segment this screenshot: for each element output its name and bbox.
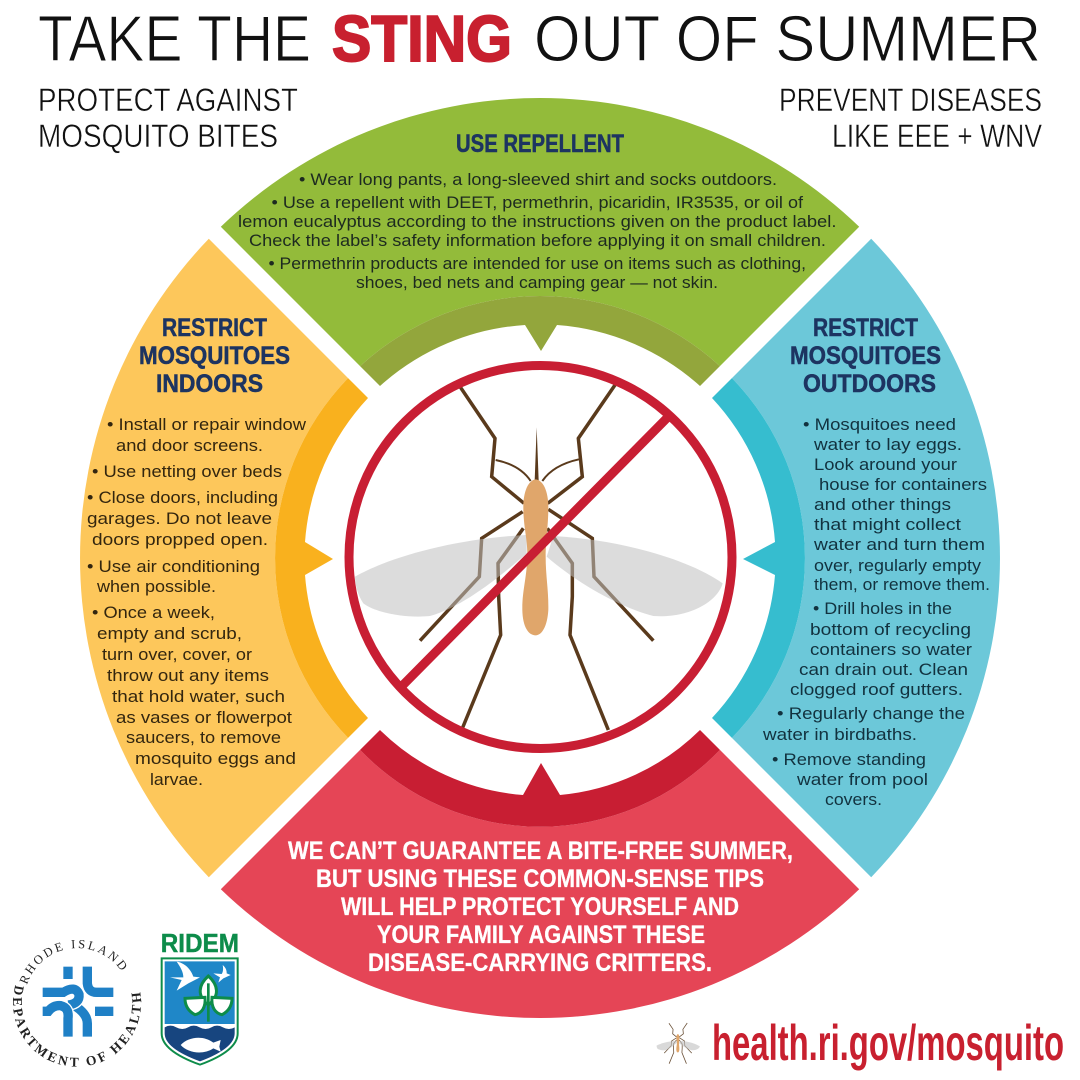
panel: use repellent: Check the label’s safety information before applying it on small children. — [249, 232, 826, 250]
logo: Rhode Island Department of Health: RHODE ISLAND — [19, 940, 126, 984]
icon: small mosquito — [657, 1023, 700, 1064]
icon: crossed-out mosquito — [349, 366, 732, 748]
panel: restrict mosquitoes indoors: doors propped open. — [92, 530, 268, 549]
panel: restrict mosquitoes outdoors: MOSQUITOES — [790, 342, 941, 370]
panel: bite-free summer message: WE CAN’T GUARANTEE A BITE-FREE SUMMER, — [288, 837, 793, 865]
panel: restrict mosquitoes outdoors: bottom of recycling — [810, 620, 971, 639]
panel: use repellent: USE REPELLENT — [456, 130, 624, 158]
panel: restrict mosquitoes indoors: • Close doors, including — [87, 488, 278, 507]
panel: restrict mosquitoes outdoors: Look around your — [814, 455, 957, 474]
panel: restrict mosquitoes outdoors: water and turn them — [813, 535, 985, 554]
panel: restrict mosquitoes outdoors: and other things — [814, 495, 951, 514]
panel: restrict mosquitoes outdoors: can drain out. Clean — [799, 660, 968, 679]
panel: restrict mosquitoes indoors: throw out any items — [107, 666, 269, 685]
subtitle left: MOSQUITO BITES — [38, 118, 278, 154]
panel: use repellent: • Wear long pants, a long-sleeved shirt and socks outdoors. — [299, 171, 777, 189]
panel: restrict mosquitoes indoors: when possible. — [96, 577, 216, 596]
panel: bite-free summer message — [221, 730, 859, 1018]
panel: restrict mosquitoes outdoors: • Regularly change the — [777, 704, 965, 723]
panel: bite-free summer message: YOUR FAMILY AGAINST THESE — [377, 921, 705, 949]
panel: restrict mosquitoes outdoors: water in birdbaths. — [762, 725, 917, 744]
panel: bite-free summer message: WILL HELP PROTECT YOURSELF AND — [341, 893, 739, 921]
panel: restrict mosquitoes outdoors: RESTRICT — [813, 314, 918, 342]
panel: restrict mosquitoes outdoors: clogged roof gutters. — [790, 680, 963, 699]
logo: Rhode Island Department of Health: DEPARTMENT OF HEALTH — [13, 985, 142, 1067]
panel: bite-free summer message: DISEASE-CARRYING CRITTERS. — [368, 949, 712, 977]
panel: use repellent: • Use a repellent with DEET, permethrin, picaridin, IR3535, or oil of — [272, 194, 803, 212]
panel: restrict mosquitoes indoors: turn over, cover, or — [102, 645, 252, 664]
panel: restrict mosquitoes indoors: that hold water, such — [112, 687, 285, 706]
panel: restrict mosquitoes outdoors: containers so water — [810, 640, 972, 659]
panel: use repellent: • Permethrin products are intended for use on items such as clothing, — [268, 255, 806, 273]
subtitle left — [38, 82, 298, 154]
panel: restrict mosquitoes indoors: INDOORS — [156, 370, 263, 398]
panel: restrict mosquitoes outdoors — [712, 239, 1000, 877]
panel: restrict mosquitoes indoors: saucers, to remove — [126, 728, 281, 747]
panel: restrict mosquitoes outdoors: water to lay eggs. — [813, 435, 962, 454]
subtitle right — [779, 82, 1043, 154]
panel: restrict mosquitoes indoors: • Use air conditioning — [87, 557, 260, 576]
panel: restrict mosquitoes indoors: as vases or flowerpot — [116, 708, 292, 727]
panel: restrict mosquitoes indoors: • Use netting over beds — [92, 462, 282, 481]
panel: restrict mosquitoes outdoors: OUTDOORS — [803, 370, 936, 398]
panel: restrict mosquitoes indoors: • Install or repair window — [107, 415, 307, 434]
panel: use repellent: shoes, bed nets and camping gear — not skin. — [356, 274, 718, 292]
panel: restrict mosquitoes indoors: and door screens. — [116, 436, 263, 455]
panel: restrict mosquitoes outdoors: them, or remove them. — [814, 575, 990, 594]
panel: restrict mosquitoes indoors: MOSQUITOES — [139, 342, 290, 370]
panel: restrict mosquitoes indoors: • Once a week, — [92, 603, 215, 622]
panel: restrict mosquitoes outdoors: • Remove standing — [772, 750, 926, 769]
panel: restrict mosquitoes outdoors: • Mosquitoes need — [803, 415, 956, 434]
panel: restrict mosquitoes indoors: larvae. — [150, 770, 203, 789]
logo: Rhode Island Department of Health — [13, 940, 142, 1067]
subtitle right: LIKE EEE + WNV — [832, 118, 1043, 154]
panel: restrict mosquitoes outdoors: that might collect — [814, 515, 961, 534]
logo: RIDEM shield: RIDEM — [161, 928, 239, 958]
panel: restrict mosquitoes outdoors: covers. — [825, 790, 882, 809]
panel: restrict mosquitoes indoors — [80, 239, 368, 877]
panel: restrict mosquitoes indoors: garages. Do not leave — [87, 509, 272, 528]
panel: restrict mosquitoes outdoors: water from pool — [796, 770, 928, 789]
panel: restrict mosquitoes outdoors: over, regularly empty — [814, 556, 982, 575]
subtitle left: PROTECT AGAINST — [38, 82, 298, 118]
title: STING — [332, 2, 512, 75]
title — [38, 2, 1041, 75]
panel: use repellent — [221, 98, 859, 386]
panel: restrict mosquitoes indoors: RESTRICT — [162, 314, 267, 342]
logo: RIDEM shield — [161, 928, 239, 1066]
panel: restrict mosquitoes outdoors: • Drill holes in the — [813, 599, 952, 618]
title: OUT OF SUMMER — [534, 2, 1041, 75]
panel: bite-free summer message: BUT USING THESE COMMON-SENSE TIPS — [316, 865, 764, 893]
panel: restrict mosquitoes outdoors: house for containers — [819, 475, 987, 494]
panel: restrict mosquitoes indoors: mosquito eggs and — [135, 749, 296, 768]
title: TAKE THE — [38, 2, 311, 75]
panel: use repellent: lemon eucalyptus according to the instructions given on the product label. — [238, 213, 836, 231]
panel: restrict mosquitoes indoors: empty and scrub, — [97, 624, 242, 643]
